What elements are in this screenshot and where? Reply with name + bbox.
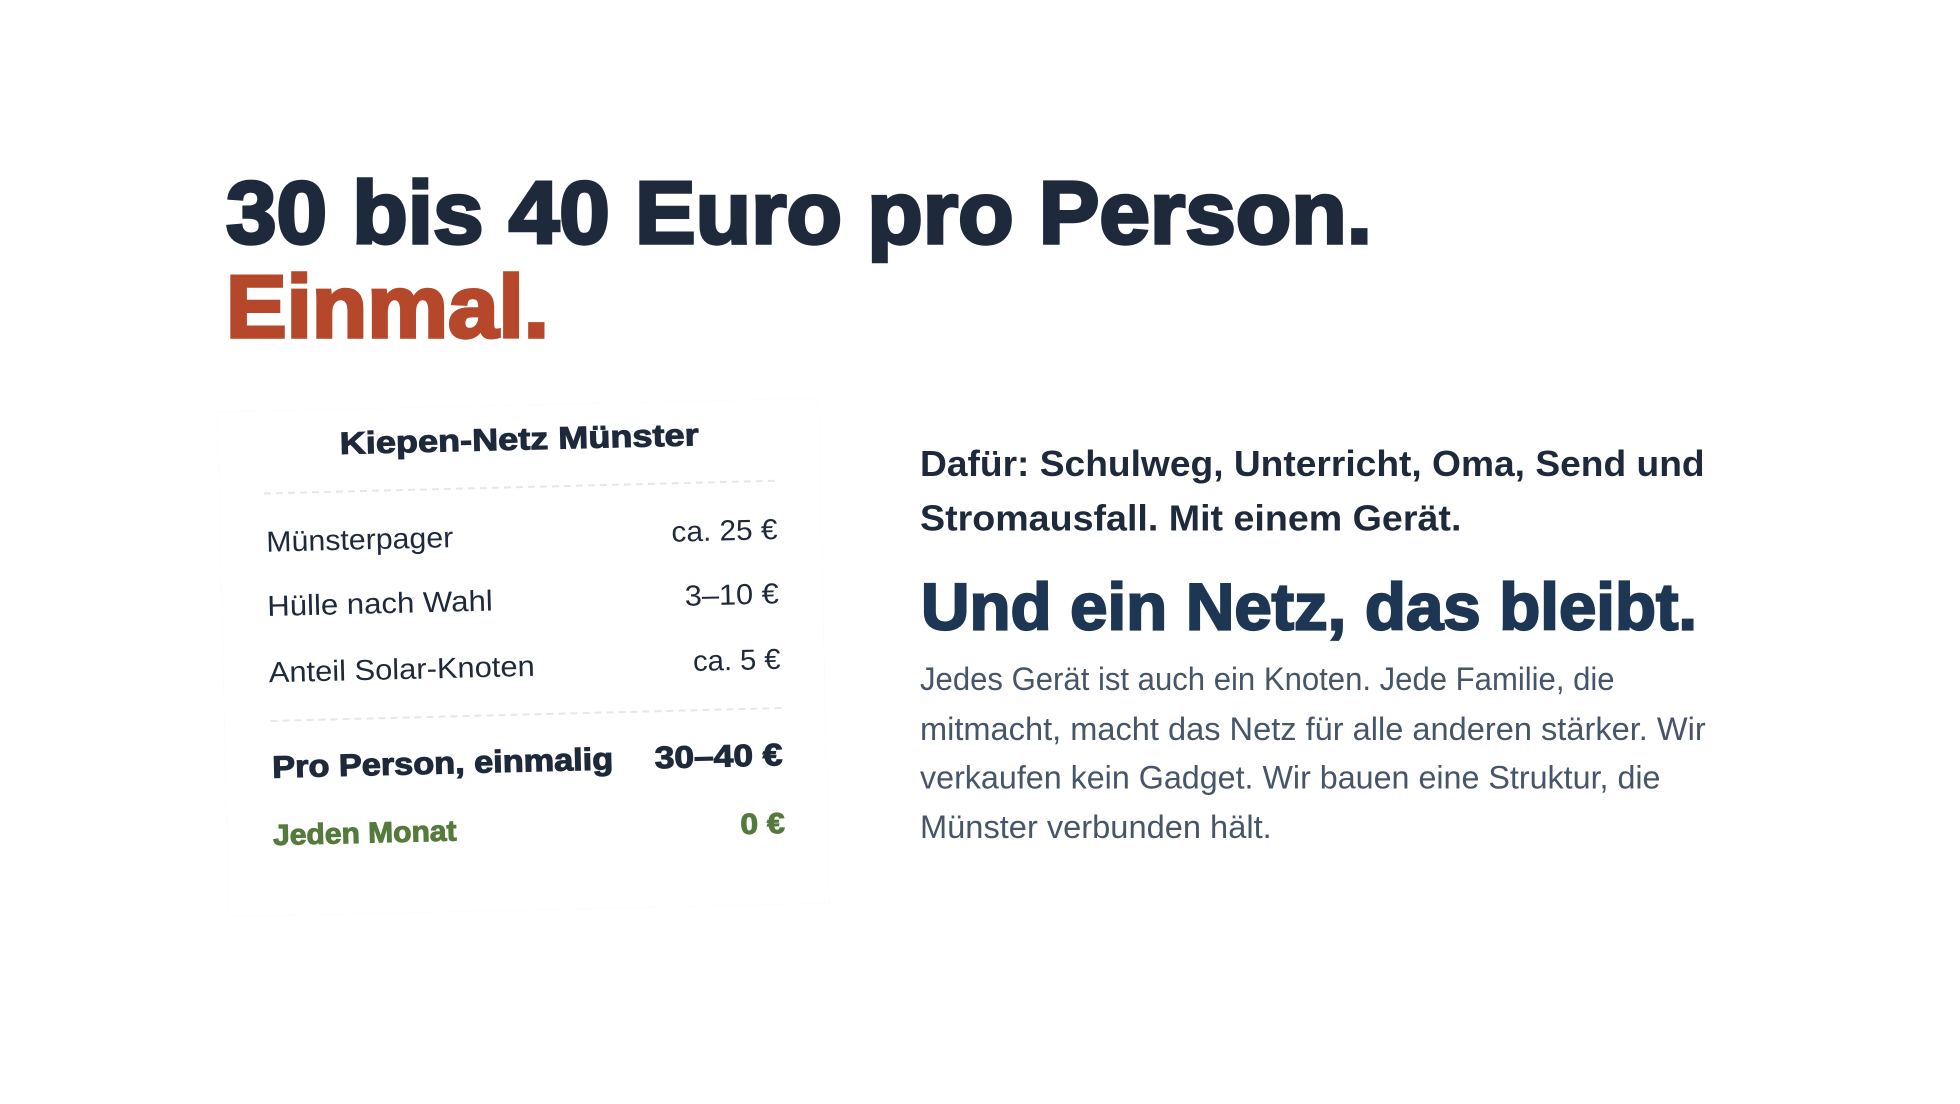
body text: mitmacht, macht das Netz für alle anderen stärker. Wir: [920, 711, 1706, 747]
row: Hülle nach Wahl: Hülle nach Wahl: [267, 585, 493, 623]
row: Münsterpager: [266, 514, 778, 559]
row: Anteil Solar-Knoten: [268, 644, 781, 689]
row: Anteil Solar-Knoten: Anteil Solar-Knoten: [268, 651, 535, 689]
row: Pro Person total: Pro Person, einmalig: [272, 741, 614, 785]
title: 30 bis 40 Euro pro Person.: [226, 163, 1372, 262]
row: Münsterpager: Münsterpager: [266, 522, 454, 559]
lead text: Dafür: Schulweg, Unterricht, Oma, Send und: [920, 443, 1705, 484]
body text: verkaufen kein Gadget. Wir bauen eine Struktur, die: [920, 760, 1660, 796]
row: Hülle nach Wahl: [267, 578, 779, 623]
body text: Jedes Gerät ist auch ein Knoten. Jede Familie, die: [920, 661, 1615, 697]
row: Jeden Monat: Jeden Monat: [273, 816, 457, 852]
row: Jeden Monat: 0 €: [740, 808, 785, 841]
row: Hülle nach Wahl: 3–10 €: [684, 578, 779, 613]
row: Pro Person total: [272, 737, 783, 785]
panel: receipt: [217, 398, 830, 917]
subheading: Und ein Netz, das bleibt.: [921, 569, 1697, 643]
body text: [920, 661, 1706, 845]
receipt heading: Kiepen-Netz Münster: [339, 417, 699, 461]
lead text: [920, 443, 1705, 538]
title: [226, 163, 1372, 356]
title: Einmal.: [226, 257, 549, 356]
receipt card background: [217, 398, 830, 917]
body text: Münster verbunden hält.: [920, 809, 1272, 845]
lead text: Stromausfall. Mit einem Gerät.: [920, 497, 1461, 538]
row: Jeden Monat: [273, 808, 785, 852]
row: Münsterpager: ca. 25 €: [671, 514, 778, 549]
row: Anteil Solar-Knoten: ca. 5 €: [693, 644, 781, 678]
row: Pro Person total: 30–40 €: [654, 737, 783, 775]
